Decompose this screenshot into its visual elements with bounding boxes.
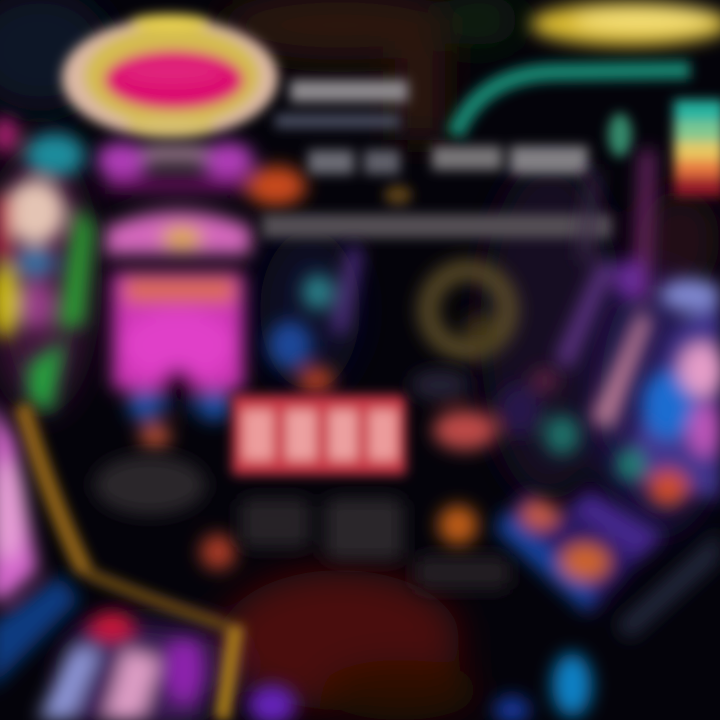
- lower pink machine buttons: [94, 455, 236, 570]
- gold rail: [22, 405, 236, 720]
- right keypad: [495, 490, 720, 640]
- gold emblem: [428, 270, 508, 350]
- bottom floor lights: [248, 653, 592, 720]
- machine top ornaments: [96, 142, 306, 255]
- heading blur block: [262, 80, 612, 238]
- center machine buttons: [240, 498, 510, 590]
- right diagonal strips: [555, 150, 655, 430]
- ceiling light: [530, 2, 720, 46]
- teal arc: [455, 70, 690, 135]
- rainbow light: [608, 100, 720, 196]
- right machine screen: [616, 279, 720, 506]
- pink machine panel: [112, 272, 244, 450]
- right center buttons: [410, 368, 580, 545]
- lower left pink and blue: [0, 400, 80, 690]
- marquee oval: [62, 14, 278, 138]
- left machine: [0, 117, 94, 412]
- red reels panel: [232, 395, 406, 475]
- center machine screen: [268, 245, 362, 394]
- bottom left machine: [38, 612, 205, 720]
